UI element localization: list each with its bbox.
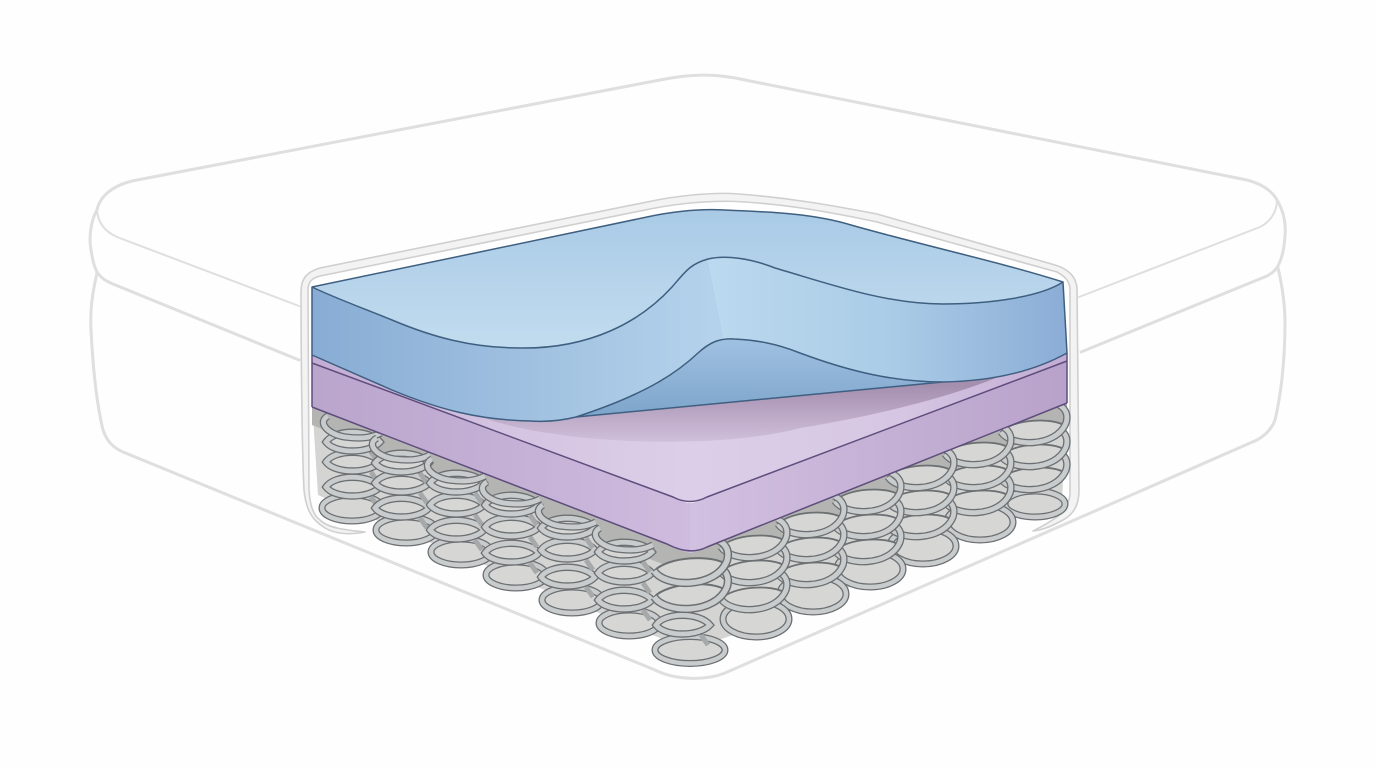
purple layer outlines — [312, 353, 1067, 551]
coil: right column 4 — [835, 473, 903, 587]
coil: left column 3 — [427, 459, 491, 565]
coil: left column 4 — [482, 482, 546, 588]
blue foam top surface — [312, 210, 1063, 348]
coil: left column 2 — [372, 438, 436, 543]
shadow under purple layer — [312, 400, 1067, 575]
blue foam left face — [312, 259, 724, 421]
coil: front centre — [654, 540, 728, 664]
purple layer right side — [690, 361, 1067, 553]
spring coils — [322, 404, 1067, 664]
coil: right column 5 — [778, 496, 846, 612]
coil: left column 5 — [538, 505, 602, 613]
spring cavity backing — [312, 400, 1067, 650]
coil: right column 6 — [721, 519, 789, 637]
coil: right column 1 — [1001, 404, 1067, 517]
coil: left column 1 — [322, 416, 382, 521]
purple layer top surface — [312, 350, 1067, 502]
blue memory foam layer — [312, 210, 1067, 421]
blue foam right face — [708, 257, 1067, 382]
purple comfort layer — [312, 350, 1067, 553]
foam cut-out frame — [301, 193, 1079, 534]
mattress outer outline — [90, 75, 1285, 678]
blue foam curled underside — [576, 339, 943, 417]
purple layer left side — [312, 363, 690, 553]
coil: left column 6 — [595, 528, 659, 636]
blue foam outlines — [312, 210, 1067, 421]
purple layer shadow — [484, 371, 1012, 442]
coil: right column 2 — [945, 426, 1013, 540]
coil: right column 3 — [888, 449, 956, 564]
